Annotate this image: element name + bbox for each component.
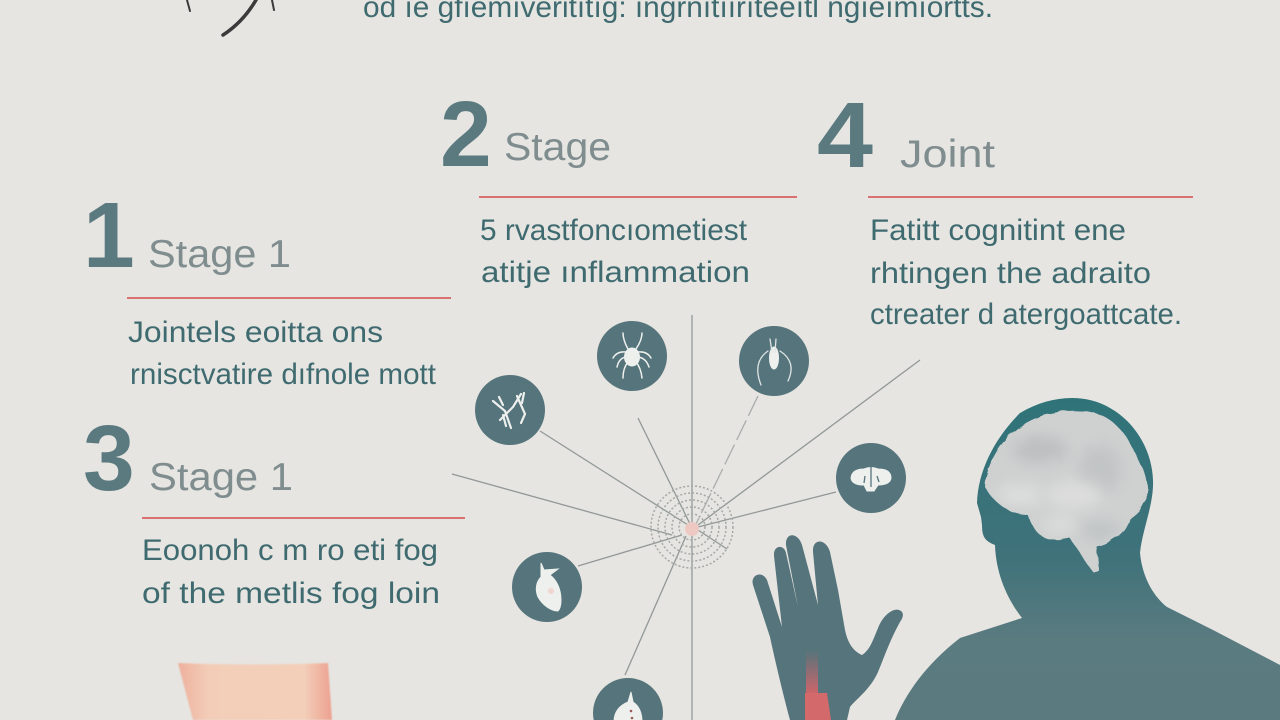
number 4: 4 xyxy=(817,83,873,187)
icon: brain xyxy=(836,443,906,513)
stage 4 description: Fatitt cognitint ene xyxy=(870,214,1126,247)
number 2: 2 xyxy=(440,82,492,186)
number 3: 3 xyxy=(83,406,135,510)
icon: mite xyxy=(597,321,667,391)
icon: branching nerves xyxy=(475,375,545,445)
brain xyxy=(984,410,1148,572)
heading: stage 1 repeated: Stage 1 xyxy=(149,456,293,499)
spokes xyxy=(452,315,920,720)
illustration: peach limb xyxy=(178,663,332,720)
stage 4 description: ctreater d atergoattcate. xyxy=(870,298,1182,331)
stage 2 description: 5 rvastfoncıometiest xyxy=(480,214,748,247)
number 1: 1 xyxy=(83,183,135,287)
stage 2 description: atitje ınflammation xyxy=(481,256,750,289)
inflamed wrist xyxy=(805,650,831,720)
illustration: head silhouette with brain xyxy=(895,398,1280,720)
panel: stage 3 xyxy=(83,406,465,610)
hub: spider web xyxy=(651,486,733,568)
stage 1 description: rnisctvatire dıfnole mott xyxy=(130,358,437,391)
panel: stage 1 xyxy=(83,183,451,391)
icon: insect legs at top xyxy=(187,0,274,35)
stage 4 description: rhtingen the adraito xyxy=(870,257,1151,290)
icon: ribcage xyxy=(739,326,809,396)
heading: joint: Joint xyxy=(900,133,995,176)
illustration: raised hand xyxy=(753,535,903,720)
icon: organ xyxy=(593,678,663,720)
heading: stage 1: Stage 1 xyxy=(148,233,291,276)
stage 3 description: of the metlis fog loin xyxy=(142,577,440,610)
heading: stage: Stage xyxy=(504,126,611,169)
panel: joint stage 4 xyxy=(817,83,1193,331)
icon: heart xyxy=(512,552,582,622)
stage 1 description: Jointels eoitta ons xyxy=(128,316,383,349)
panel: stage 2 xyxy=(440,82,797,289)
stage 3 description: Eoonoh c m ro eti fog xyxy=(142,534,438,567)
radial diagram xyxy=(452,315,920,720)
